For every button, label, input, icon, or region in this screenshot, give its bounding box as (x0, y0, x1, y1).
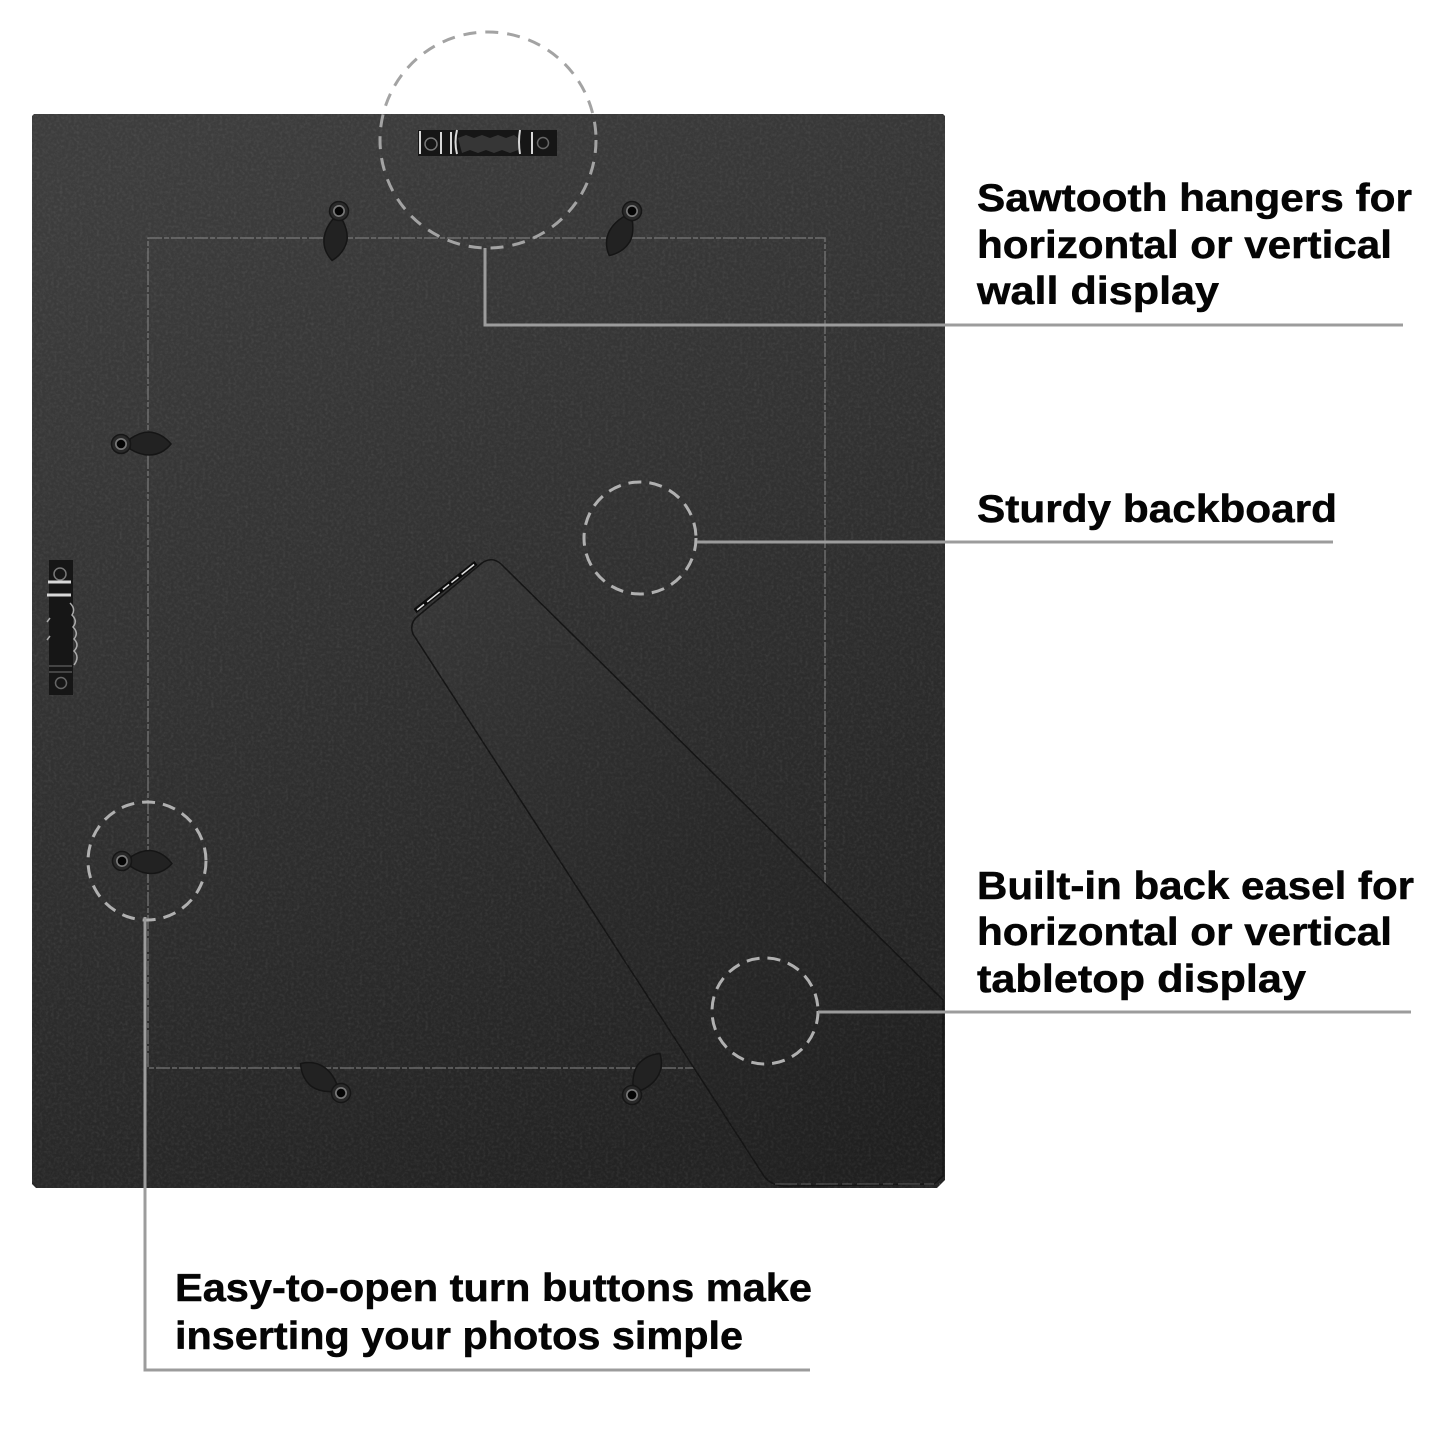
text: turn buttons (175, 1267, 812, 1358)
text: sawtooth hangers (976, 177, 1412, 313)
text: sawtooth hangers: Sawtooth hangers for (977, 177, 1412, 220)
leader line: sawtooth hanger (485, 248, 1403, 325)
panel: back easel (412, 560, 943, 1186)
icon: turn button bottom left (293, 1055, 355, 1108)
text: back easel: tabletop display (977, 958, 1306, 1001)
icon: turn button left upper (112, 432, 171, 455)
text: back easel: horizontal or vertical (977, 911, 1392, 954)
text: sawtooth hangers: horizontal or vertical (977, 224, 1392, 267)
icon: sawtooth hanger side (47, 560, 77, 695)
leader line: easel (818, 1010, 1411, 1014)
callout circle: turn button (88, 802, 206, 920)
callout circle: backboard (584, 482, 696, 594)
callout circle: easel (712, 958, 818, 1064)
leader line: backboard (697, 540, 1333, 544)
panel: frame backboard (32, 114, 945, 1188)
callout circle: sawtooth hanger (380, 32, 596, 248)
easel hinge (415, 563, 476, 611)
stitched inner rectangle (148, 238, 825, 1068)
text: sturdy backboard: Sturdy backboard (977, 488, 1337, 531)
text: sawtooth hangers: wall display (976, 270, 1219, 313)
icon: turn button bottom right (617, 1047, 669, 1109)
leader line: turn buttons (145, 917, 810, 1370)
text: back easel (977, 865, 1414, 1001)
icon: turn button top right (599, 198, 647, 261)
text: back easel: Built-in back easel for (977, 865, 1414, 908)
icon: sawtooth hanger top (418, 130, 557, 156)
text: turn buttons: Easy-to-open turn buttons make (175, 1267, 812, 1310)
icon: turn button left lower (112, 849, 173, 875)
text: turn buttons: inserting your photos simple (175, 1315, 743, 1358)
icon: turn button top left (321, 200, 352, 262)
